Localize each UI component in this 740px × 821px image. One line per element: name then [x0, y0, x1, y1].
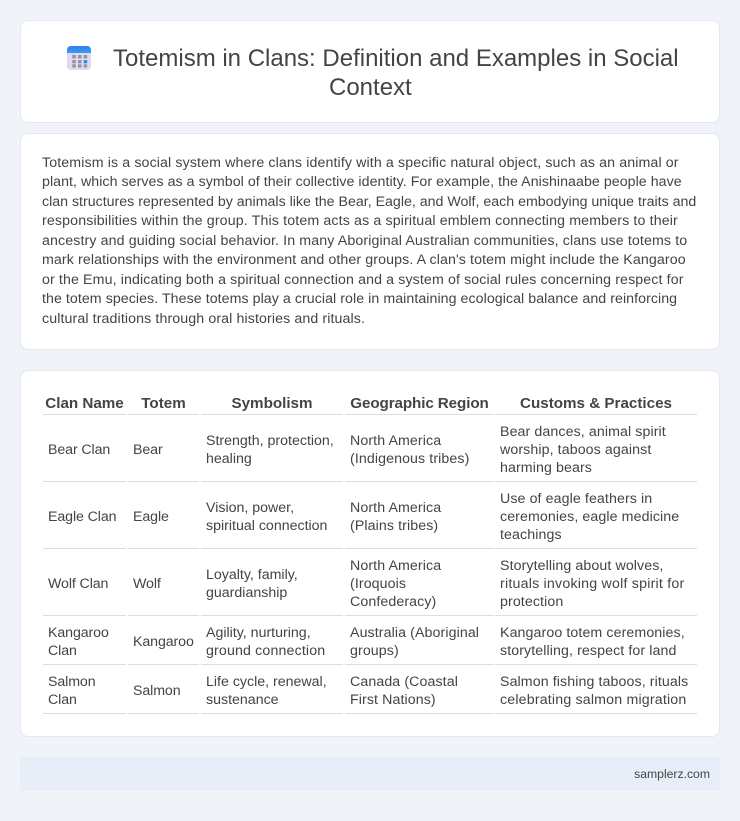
- row: Kangaroo Clan: Agility, nurturing,: [206, 625, 311, 641]
- row: Kangaroo Clan: Kangaroo totem ceremonies,: [500, 625, 685, 641]
- row: Eagle Clan: Vision, power,: [206, 500, 294, 516]
- row: Eagle Clan: ceremonies, eagle medicine: [500, 509, 679, 525]
- intro paragraph: cultural traditions through oral histories and rituals.: [42, 311, 365, 327]
- row: Eagle Clan: North America: [350, 500, 441, 516]
- row: Kangaroo Clan: Australia (Aboriginal: [350, 625, 479, 641]
- row: Bear Clan: Bear: [133, 442, 163, 458]
- row: Kangaroo Clan: ground connection: [206, 643, 325, 659]
- row: Kangaroo Clan: Clan: [48, 643, 77, 659]
- intro paragraph: [42, 155, 696, 327]
- row: Wolf Clan: protection: [500, 594, 563, 610]
- row: Wolf Clan: [48, 558, 684, 610]
- row: Wolf Clan: Wolf: [133, 576, 161, 592]
- row: Eagle Clan: Eagle: [133, 509, 169, 525]
- row: Kangaroo Clan: Kangaroo: [48, 625, 109, 641]
- row: Bear Clan: harming bears: [500, 460, 592, 476]
- footer bar: [20, 757, 720, 791]
- row: Salmon Clan: Clan: [48, 692, 77, 708]
- row: Salmon Clan: [48, 674, 688, 708]
- row: Eagle Clan: Eagle Clan: [48, 509, 116, 525]
- row: Kangaroo Clan: [48, 625, 685, 659]
- table: [43, 395, 697, 714]
- title card: [20, 20, 720, 123]
- intro paragraph: clan structures represented by animals like the Bear, Eagle, and Wolf, each embodying unique traits and: [42, 194, 696, 210]
- row: Wolf Clan: Loyalty, family,: [206, 567, 298, 583]
- table panel: [20, 370, 720, 737]
- intro paragraph: ancestry and guiding social behavior. In many Aboriginal Australian communities, clans use totems to: [42, 233, 687, 249]
- footer source: samplerz.com: [634, 767, 710, 781]
- row: Kangaroo Clan: storytelling, respect for land: [500, 643, 676, 659]
- row: Salmon Clan: celebrating salmon migration: [500, 692, 686, 708]
- table header: Totem: [141, 395, 186, 412]
- row: Bear Clan: worship, taboos against: [500, 442, 651, 458]
- row: Wolf Clan: Confederacy): [350, 594, 436, 610]
- row: Eagle Clan: [48, 491, 679, 543]
- icon: calendar grid: [67, 46, 91, 70]
- intro paragraph: or the Emu, indicating both a spiritual connection and a system of social rules concerning respect for: [42, 272, 684, 288]
- row: Bear Clan: (Indigenous tribes): [350, 451, 469, 467]
- heading: [113, 45, 679, 101]
- heading: Totemism in Clans: Definition and Examples in Social: [113, 45, 679, 72]
- row: Bear Clan: Bear Clan: [48, 442, 110, 458]
- row: Eagle Clan: Use of eagle feathers in: [500, 491, 652, 507]
- row: Bear Clan: Bear dances, animal spirit: [500, 424, 666, 440]
- table header: Geographic Region: [350, 395, 489, 412]
- table header: Customs & Practices: [520, 395, 672, 412]
- table header: Symbolism: [231, 395, 313, 412]
- intro paragraph: plant, which serves as a symbol of their collective identity. For example, the Anishinaabe people have: [42, 174, 682, 190]
- intro paragraph: Totemism is a social system where clans identify with a specific natural object, such as an animal or: [42, 155, 679, 171]
- row: Salmon Clan: Salmon: [48, 674, 96, 690]
- row: Salmon Clan: Salmon fishing taboos, rituals: [500, 674, 688, 690]
- row: Bear Clan: Strength, protection,: [206, 433, 334, 449]
- row: Wolf Clan: rituals invoking wolf spirit for: [500, 576, 684, 592]
- intro paragraph: the totem species. These totems play a crucial role in maintaining ecological balance and reinforcing: [42, 291, 677, 307]
- heading: Context: [329, 74, 412, 101]
- row: Wolf Clan: Wolf Clan: [48, 576, 108, 592]
- row: Wolf Clan: Storytelling about wolves,: [500, 558, 663, 574]
- row: Salmon Clan: First Nations): [350, 692, 436, 708]
- row: Wolf Clan: guardianship: [206, 585, 287, 601]
- row: Salmon Clan: sustenance: [206, 692, 279, 708]
- table header: Clan Name: [45, 395, 124, 412]
- intro panel: [20, 133, 720, 350]
- row: Salmon Clan: Canada (Coastal: [350, 674, 458, 690]
- row: Bear Clan: healing: [206, 451, 252, 467]
- row: Eagle Clan: teachings: [500, 527, 562, 543]
- row: Kangaroo Clan: Kangaroo: [133, 634, 194, 650]
- row: Salmon Clan: Salmon: [133, 683, 181, 699]
- row: Wolf Clan: (Iroquois: [350, 576, 406, 592]
- intro paragraph: responsibilities within the group. This totem acts as a spiritual emblem connecting members to their: [42, 213, 678, 229]
- table header: [45, 395, 672, 412]
- intro paragraph: mark relationships with the environment and other groups. A clan's totem might include the Kangaroo: [42, 252, 686, 268]
- row: Bear Clan: North America: [350, 433, 441, 449]
- row: Bear Clan: [48, 424, 666, 476]
- row: Eagle Clan: (Plains tribes): [350, 518, 438, 534]
- row: Kangaroo Clan: groups): [350, 643, 399, 659]
- row: Salmon Clan: Life cycle, renewal,: [206, 674, 327, 690]
- row: Wolf Clan: North America: [350, 558, 441, 574]
- row: Eagle Clan: spiritual connection: [206, 518, 327, 534]
